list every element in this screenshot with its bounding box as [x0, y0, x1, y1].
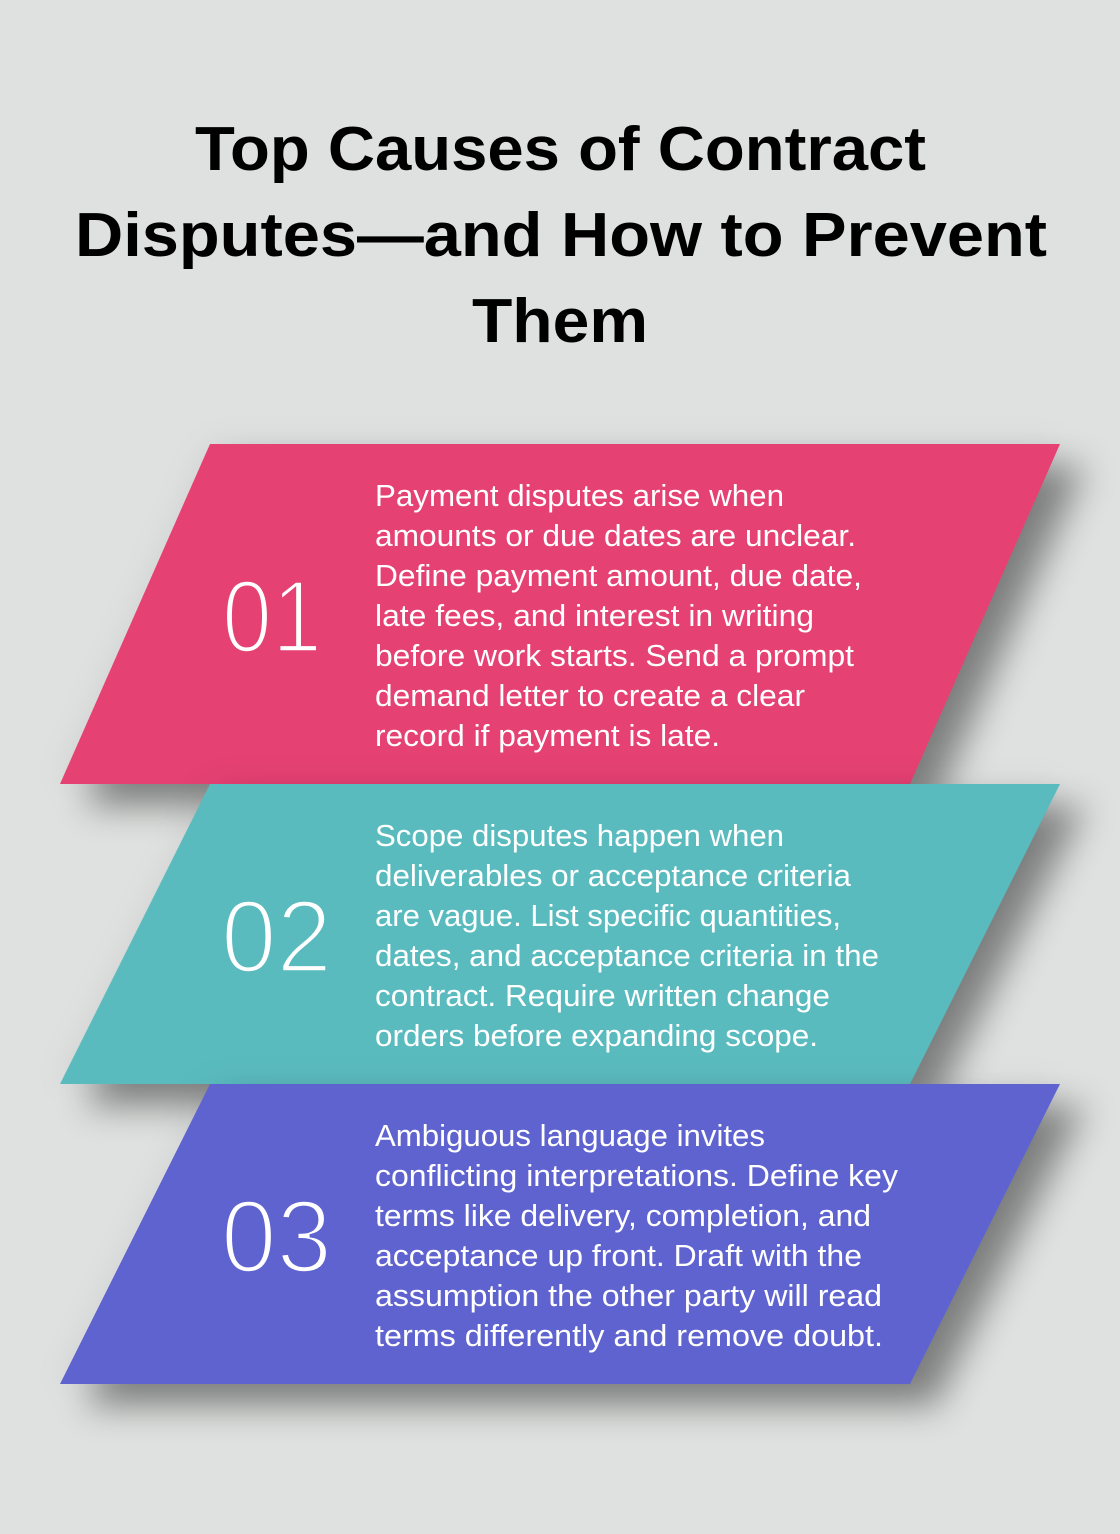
title: Them	[472, 287, 648, 356]
title: Top Causes of Contract	[195, 115, 926, 184]
body text: are vague. List specific quantities,	[375, 898, 841, 933]
number 03: 03	[221, 1179, 332, 1294]
body text: Payment disputes arise when	[375, 478, 784, 513]
panel: 01 payment disputes	[60, 444, 1060, 784]
panel: 02 scope disputes	[60, 784, 1060, 1084]
body text	[375, 1118, 899, 1353]
body text	[375, 818, 879, 1053]
body text: Ambiguous language invites	[375, 1118, 765, 1153]
body text: amounts or due dates are unclear.	[375, 518, 856, 553]
body text: dates, and acceptance criteria in the	[375, 938, 879, 973]
body text: contract. Require written change	[375, 978, 830, 1013]
body text	[375, 478, 862, 753]
number 02: 02	[221, 879, 332, 994]
body text: Define payment amount, due date,	[375, 558, 862, 593]
body text: assumption the other party will read	[375, 1278, 882, 1313]
panel shape	[60, 1084, 1060, 1384]
title	[75, 115, 1047, 356]
body text: acceptance up front. Draft with the	[375, 1238, 862, 1273]
title: Disputes—and How to Prevent	[75, 201, 1047, 270]
body text: before work starts. Send a prompt	[375, 638, 854, 673]
number 01: 01	[222, 559, 322, 674]
body text: demand letter to create a clear	[375, 678, 805, 713]
body text: orders before expanding scope.	[375, 1018, 818, 1053]
body text: late fees, and interest in writing	[375, 598, 814, 633]
panel shape	[60, 444, 1060, 784]
body text: terms like delivery, completion, and	[375, 1198, 871, 1233]
panel: 03 ambiguous language	[60, 1084, 1060, 1384]
body text: terms differently and remove doubt.	[375, 1318, 883, 1353]
body text: conflicting interpretations. Define key	[375, 1158, 899, 1193]
body text: record if payment is late.	[375, 718, 720, 753]
panel shape	[60, 784, 1060, 1084]
body text: deliverables or acceptance criteria	[375, 858, 852, 893]
body text: Scope disputes happen when	[375, 818, 784, 853]
